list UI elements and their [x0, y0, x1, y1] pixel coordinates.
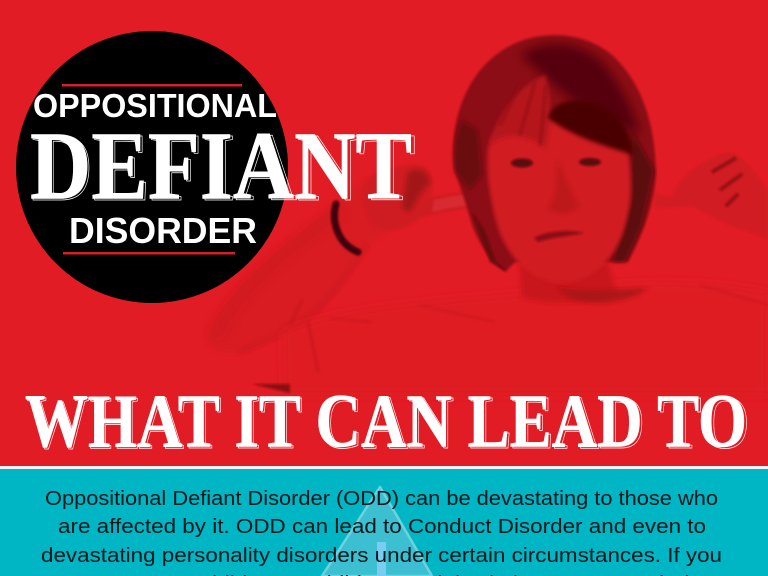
warning triangle watermark: [322, 487, 432, 576]
intro paragraph: devastating personality disorders under certain circumstances. If you: [41, 544, 722, 567]
photo: bracelet: [334, 204, 358, 252]
photo: eyes: [511, 158, 601, 168]
photo: face: [487, 75, 634, 283]
badge rule top: [62, 84, 242, 86]
photo: neck: [519, 262, 648, 303]
photo: mouth: [534, 231, 584, 242]
intro paragraph: are affected by it. ODD can lead to Conduct Disorder and even to: [58, 515, 706, 538]
heading: Disorder: DISORDER: [69, 210, 257, 251]
heading: Oppositional: OPPOSITIONAL: [33, 87, 277, 124]
photo: hair back: [453, 35, 656, 272]
intro paragraph: Oppositional Defiant Disorder (ODD) can be devastating to those who: [45, 487, 718, 510]
photo: left fist and finger: [363, 164, 488, 230]
photo: boy plugging his ears: [207, 35, 768, 395]
heading: Defiant: DEFIANT: [32, 114, 416, 222]
badge rule bottom: [63, 252, 235, 254]
photo: left arm: [207, 178, 404, 354]
heading: Defiant: DEFIANT: [30, 112, 412, 220]
photo: right hand: [655, 152, 768, 240]
photo: t-shirt and shoulders: [252, 282, 768, 395]
white divider: [0, 466, 768, 469]
badge circle: [16, 31, 288, 303]
teal panel: [0, 469, 768, 576]
intro paragraph: [41, 487, 722, 576]
